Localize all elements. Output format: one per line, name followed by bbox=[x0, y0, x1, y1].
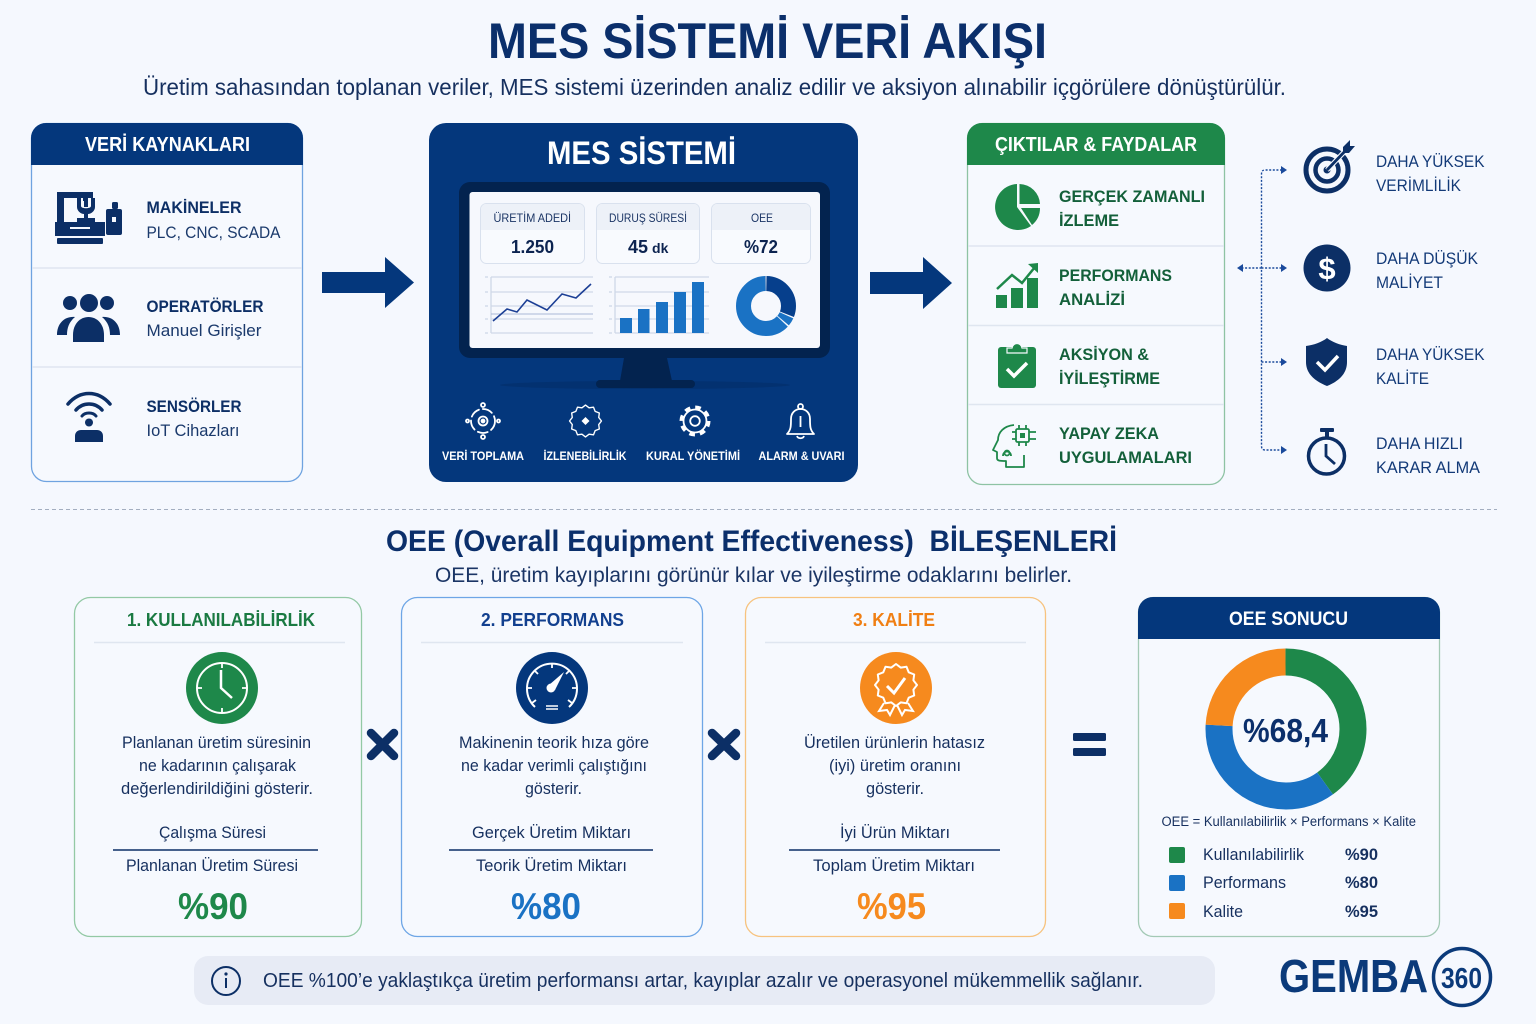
formula: kullanılabilirlik bbox=[113, 824, 318, 875]
icon: dollar: $ bbox=[1318, 251, 1336, 286]
benefit: daha düşük maliyet bbox=[1304, 244, 1479, 292]
heading: kalite: 3. KALİTE bbox=[853, 609, 935, 630]
description: kullanılabilirlik: Planlanan üretim süresinin bbox=[122, 734, 311, 752]
text: kalite: KALİTE bbox=[1376, 369, 1429, 388]
kpi: üretim adedi: ÜRETİM ADEDİ bbox=[494, 211, 571, 225]
kpi: OEE bbox=[712, 204, 810, 264]
labels: MES functions: VERİ TOPLAMA bbox=[442, 448, 524, 463]
text: performans analizi: ANALİZİ bbox=[1059, 290, 1125, 309]
kpi: duruş süresi: DURUŞ SÜRESİ bbox=[609, 211, 687, 225]
subtitle: Üretim sahasından toplanan veriler, MES sistemi üzerinden analiz edilir ve aksiyon alınabilir içgörülere dönüştürülür. bbox=[143, 74, 1286, 100]
text: kalite: DAHA YÜKSEK bbox=[1376, 345, 1485, 364]
line chart bbox=[485, 277, 593, 333]
description: kalite: Üretilen ürünlerin hatasız bbox=[804, 734, 985, 752]
icon: gauge bbox=[516, 652, 588, 724]
value: performans: %80 bbox=[511, 886, 581, 927]
formula: kalite bbox=[789, 823, 1000, 875]
text: verimlilik bbox=[1376, 152, 1485, 195]
formula: kullanılabilirlik: Planlanan Üretim Süresi bbox=[126, 857, 298, 875]
icon: growth chart bbox=[996, 263, 1038, 308]
text: karar alma: DAHA HIZLI bbox=[1376, 434, 1463, 453]
legend: kalite bbox=[1169, 902, 1378, 921]
panel: çıktılar ve faydalar bbox=[967, 123, 1225, 484]
description: kalite: (iyi) üretim oranını bbox=[829, 757, 961, 775]
icon: target bbox=[1306, 140, 1355, 191]
heading: OEE sonucu: OEE SONUCU bbox=[1229, 609, 1348, 630]
heading: çıktılar: ÇIKTILAR & FAYDALAR bbox=[995, 134, 1197, 156]
legend: performans: %80 bbox=[1345, 873, 1378, 892]
text: aksiyon ve iyileştirme: İYİLEŞTİRME bbox=[1059, 369, 1160, 388]
donut: OEE result: %68,4 bbox=[1243, 712, 1329, 749]
heading: OEE bileşenleri: OEE (Overall Equipment Effectiveness) BİLEŞENLERİ bbox=[386, 525, 1117, 558]
text: sensörler: IoT Cihazları bbox=[146, 421, 240, 440]
kpi: üretim adedi: 1.250 bbox=[511, 237, 554, 257]
text: yapay zeka uygulamaları bbox=[1059, 424, 1192, 467]
value: kalite: %95 bbox=[857, 886, 926, 927]
description: performans: Makinenin teorik hıza göre bbox=[459, 734, 649, 752]
arrows: dotted benefit connectors bbox=[1237, 166, 1287, 454]
benefit: daha hızlı karar alma bbox=[1308, 428, 1481, 477]
text: operatörler: OPERATÖRLER bbox=[146, 297, 264, 316]
description: kalite bbox=[804, 734, 985, 798]
value: kullanılabilirlik: %90 bbox=[178, 886, 248, 927]
text: makineler bbox=[146, 198, 281, 242]
text: maliyet: MALİYET bbox=[1376, 273, 1443, 292]
text: kalite bbox=[1376, 345, 1485, 388]
icon: dollar bbox=[1304, 244, 1350, 292]
icon: operators bbox=[57, 294, 120, 342]
multiply sign 2 bbox=[712, 733, 736, 756]
panel: performans bbox=[402, 598, 702, 936]
kpi: duruş süresi bbox=[596, 204, 700, 264]
bar chart bbox=[609, 277, 709, 333]
text: operatörler bbox=[146, 297, 264, 340]
legend: kullanılabilirlik: Kullanılabilirlik bbox=[1203, 845, 1304, 864]
icon: AI head bbox=[993, 425, 1036, 467]
legend: performans bbox=[1169, 873, 1378, 892]
description: performans bbox=[459, 734, 649, 798]
text: performans analizi: PERFORMANS bbox=[1059, 266, 1172, 285]
text: karar alma bbox=[1376, 434, 1481, 477]
text: operatörler: Manuel Girişler bbox=[146, 321, 262, 340]
labels: MES functions bbox=[442, 448, 844, 463]
text: verimlilik: VERİMLİLİK bbox=[1376, 176, 1462, 195]
kpi: duruş süresi: 45 dk bbox=[628, 237, 669, 257]
text: aksiyon ve iyileştirme bbox=[1059, 345, 1160, 388]
text: makineler: MAKİNELER bbox=[146, 198, 242, 217]
kpi: OEE: OEE bbox=[751, 211, 773, 225]
equals sign bbox=[1073, 733, 1106, 756]
text: yapay zeka uygulamaları: YAPAY ZEKA bbox=[1059, 424, 1159, 443]
monitor dashboard bbox=[459, 182, 830, 389]
panel: veri kaynakları bbox=[31, 123, 303, 482]
panel: kullanılabilirlik bbox=[74, 598, 362, 936]
formula: kalite: İyi Ürün Miktarı bbox=[840, 823, 950, 842]
icon: quality badge bbox=[860, 652, 932, 724]
text: sensörler bbox=[146, 397, 242, 440]
kpi: OEE: %72 bbox=[744, 237, 778, 257]
icon: shield bbox=[1306, 338, 1347, 386]
callout: OEE note bbox=[194, 956, 1215, 1005]
logo: GEMBA 360: GEMBA bbox=[1279, 950, 1428, 1002]
panel: MES sistemi bbox=[429, 123, 858, 482]
description: kullanılabilirlik: ne kadarının çalışarak bbox=[139, 757, 297, 775]
title: MES SİSTEMİ VERİ AKIŞI bbox=[488, 13, 1047, 69]
description: kalite: gösterir. bbox=[866, 780, 924, 798]
text: aksiyon ve iyileştirme: AKSİYON & bbox=[1059, 345, 1149, 364]
description: performans: gösterir. bbox=[525, 780, 582, 798]
labels: MES functions: ALARM & UVARI bbox=[758, 449, 844, 463]
icon: info bbox=[212, 967, 240, 995]
icon: clipboard check bbox=[998, 344, 1036, 388]
legend: kalite: %95 bbox=[1345, 902, 1378, 921]
heading: MES sistemi: MES SİSTEMİ bbox=[547, 135, 736, 171]
icon: sensor bbox=[68, 394, 110, 442]
text: performans analizi bbox=[1059, 266, 1172, 309]
text: sensörler: SENSÖRLER bbox=[146, 397, 242, 416]
formula: OEE: OEE = Kullanılabilirlik × Performans × Kalite bbox=[1162, 814, 1416, 829]
icon: alarm bbox=[787, 404, 814, 438]
icon: kural yönetimi bbox=[682, 408, 708, 434]
icon: veri toplama bbox=[466, 403, 500, 439]
text: verimlilik: DAHA YÜKSEK bbox=[1376, 152, 1485, 171]
text: makineler: PLC, CNC, SCADA bbox=[146, 223, 281, 242]
icon: stopwatch bbox=[1308, 428, 1344, 474]
text: gerçek zamanlı izleme: GERÇEK ZAMANLI bbox=[1059, 187, 1205, 206]
multiply sign 1 bbox=[371, 733, 394, 756]
formula: performans: Teorik Üretim Miktarı bbox=[476, 857, 627, 875]
labels: MES functions: İZLENEBİLİRLİK bbox=[544, 448, 627, 463]
icon: machine bbox=[55, 192, 122, 244]
description: kullanılabilirlik bbox=[121, 734, 313, 798]
legend: kullanılabilirlik: %90 bbox=[1345, 845, 1378, 864]
donut chart bbox=[744, 284, 788, 328]
text: gerçek zamanlı izleme bbox=[1059, 187, 1205, 230]
panel: OEE sonucu bbox=[1138, 597, 1440, 936]
heading: performans: 2. PERFORMANS bbox=[481, 609, 624, 630]
subheading: OEE: OEE, üretim kayıplarını görünür kılar ve iyileştirme odaklarını belirler. bbox=[435, 564, 1072, 587]
text: karar alma: KARAR ALMA bbox=[1376, 458, 1481, 477]
legend: kalite: Kalite bbox=[1203, 902, 1243, 921]
legend: kullanılabilirlik bbox=[1169, 845, 1378, 864]
formula: performans: Gerçek Üretim Miktarı bbox=[472, 824, 631, 842]
text: maliyet: DAHA DÜŞÜK bbox=[1376, 249, 1479, 268]
text: yapay zeka uygulamaları: UYGULAMALARI bbox=[1059, 448, 1192, 467]
arrow: MES to outputs bbox=[870, 257, 952, 309]
formula: performans bbox=[449, 824, 653, 875]
text: maliyet bbox=[1376, 249, 1479, 292]
heading: veri kaynakları: VERİ KAYNAKLARI bbox=[85, 133, 250, 156]
heading: kullanılabilirlik: 1. KULLANILABİLİRLİK bbox=[127, 609, 316, 630]
text: OEE note: OEE %100’e yaklaştıkça üretim performansı artar, kayıplar azalır ve operasyonel mükemmellik sağlanır. bbox=[263, 970, 1143, 992]
description: kullanılabilirlik: değerlendirildiğini gösterir. bbox=[121, 780, 313, 798]
logo: GEMBA 360: 360 bbox=[1441, 963, 1482, 995]
icon: pie chart bbox=[995, 184, 1040, 230]
kpi: üretim adedi bbox=[480, 204, 584, 264]
arrow: sources to MES bbox=[322, 257, 414, 308]
benefit: daha yüksek kalite bbox=[1306, 338, 1485, 388]
formula: kalite: Toplam Üretim Miktarı bbox=[813, 857, 975, 875]
labels: MES functions: KURAL YÖNETİMİ bbox=[646, 448, 740, 463]
icon: izlenebilirlik bbox=[570, 405, 601, 437]
text: gerçek zamanlı izleme: İZLEME bbox=[1059, 211, 1119, 230]
benefit: daha yüksek verimlilik bbox=[1306, 140, 1485, 195]
donut: OEE result bbox=[1219, 662, 1353, 796]
panel: kalite bbox=[746, 598, 1046, 936]
icon: clock bbox=[186, 652, 258, 724]
legend: performans: Performans bbox=[1203, 873, 1286, 892]
formula: kullanılabilirlik: Çalışma Süresi bbox=[159, 824, 266, 842]
description: performans: ne kadar verimli çalıştığını bbox=[461, 757, 647, 775]
